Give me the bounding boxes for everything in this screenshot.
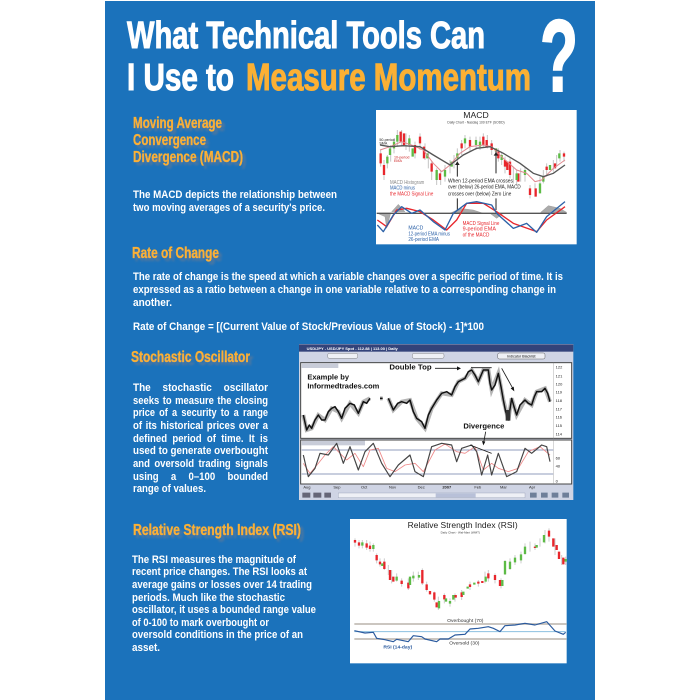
text: RSI description: oscillator, it uses a bounded range value xyxy=(132,604,316,616)
text: RSI description xyxy=(132,554,316,654)
chart: Stochastic Oscillator screenshot: Mar xyxy=(500,485,508,490)
text: Rate of Change description xyxy=(133,271,563,309)
chart: Stochastic Oscillator screenshot: 119 xyxy=(556,390,563,395)
chart: MACD: EMA xyxy=(394,159,402,163)
chart: Stochastic Oscillator screenshot: Nov xyxy=(389,485,396,490)
chart: Stochastic Oscillator screenshot: 121 xyxy=(556,373,563,378)
text: Stochastic description: price of a security to a range xyxy=(133,407,268,419)
heading: Rate of Change: Rate of Change xyxy=(132,245,219,262)
chart: Stochastic Oscillator screenshot: Indicator Blacklist xyxy=(507,354,536,358)
chart: RSI: RSI (14-day) xyxy=(383,645,412,651)
title: I Use to xyxy=(127,57,234,99)
text: MACD description xyxy=(133,189,337,214)
title xyxy=(127,15,531,99)
blue poster background xyxy=(105,1,595,700)
chart: Stochastic Oscillator screenshot: Oct xyxy=(361,485,368,490)
heading: RSI: Relative Strength Index (RSI) xyxy=(133,522,301,539)
chart: MACD: 12-period EMA minus xyxy=(408,231,450,237)
chart: Stochastic Oscillator screenshot xyxy=(299,344,573,500)
text: Rate of Change description: expressed as a ratio between a change in one variable relative to a corresponding change in xyxy=(133,284,556,296)
heading: Stochastic Oscillator: Stochastic Oscillator xyxy=(131,349,250,366)
text: Rate of Change description: The rate of change is the speed at which a variable changes over a specific period of time. It is xyxy=(133,271,563,283)
chart: Stochastic Oscillator screenshot: 40 xyxy=(556,463,561,468)
chart: Stochastic Oscillator screenshot: Apr xyxy=(529,485,536,490)
heading: MACD: Convergence xyxy=(133,132,206,149)
text: Stochastic description: seeks to measure the closing xyxy=(133,395,268,407)
chart: Stochastic Oscillator screenshot: 115 xyxy=(556,423,563,428)
chart: MACD: over (below) 26-period EMA, MACD xyxy=(448,185,521,191)
text: RSI description: recent price changes. The RSI looks at xyxy=(132,566,307,578)
chart: MACD: 9-period EMA xyxy=(463,227,496,233)
chart: MACD: Daily Chart - Nasdaq 100 ETF (SODD) xyxy=(447,121,505,125)
chart: MACD: 10-period xyxy=(394,155,409,159)
chart: RSI: Overbought (70) xyxy=(447,618,484,624)
title: What Technical Tools Can xyxy=(127,15,485,57)
chart: MACD: of the MACD xyxy=(463,233,489,239)
chart: RSI xyxy=(350,519,567,663)
chart: Stochastic Oscillator screenshot: 120 xyxy=(556,381,563,386)
chart: Stochastic Oscillator screenshot: USD/JPY - USD/JPY Spot - 112.88 | 113.00 | Daily xyxy=(307,346,399,351)
chart: MACD: crosses over (below) Zero Line xyxy=(448,191,511,197)
chart: Stochastic Oscillator screenshot: 122 xyxy=(556,365,563,370)
chart: Stochastic Oscillator screenshot: 0 xyxy=(556,479,559,484)
chart: RSI: Daily Chart - Wal-Mart (WMT) xyxy=(441,531,480,535)
text: RSI description: average gains or losses over 14 trading xyxy=(132,579,312,591)
chart: MACD xyxy=(376,110,577,244)
chart: RSI: Oversold (30) xyxy=(449,641,480,647)
chart: Stochastic Oscillator screenshot: 117 xyxy=(556,406,563,411)
chart: Stochastic Oscillator screenshot: 114 xyxy=(556,431,563,436)
chart: MACD: MACD Signal Line xyxy=(463,221,499,227)
chart: MACD: MACD Histogram xyxy=(390,180,425,186)
text: RSI description: asset. xyxy=(132,642,160,654)
text: Stochastic description: The stochastic oscillator xyxy=(133,382,269,394)
heading: MACD: Moving Average xyxy=(133,115,222,132)
text: Rate of Change formula: Rate of Change = [(Current Value of Stock/Previous Value of Stock) - 1]*100 xyxy=(133,321,484,333)
text: Stochastic description: range of values. xyxy=(133,483,206,495)
text: Rate of Change description: another. xyxy=(133,297,172,309)
chart: Stochastic Oscillator screenshot: Double Top xyxy=(389,362,432,371)
text: RSI description: periods. Much like the stochastic xyxy=(132,592,285,604)
text: MACD description: two moving averages of a security's price. xyxy=(133,202,325,214)
chart: RSI: Relative Strength Index (RSI) xyxy=(408,521,518,530)
chart: MACD: When 12-period EMA crosses xyxy=(448,178,513,184)
text: Stochastic description: and oversold trading signals xyxy=(133,458,268,470)
chart: MACD: MACD xyxy=(463,110,489,120)
chart: MACD: MACD minus xyxy=(390,185,415,191)
chart: Stochastic Oscillator screenshot: Informedtrades.com xyxy=(307,382,380,391)
text: Stochastic description: used to generate overbought xyxy=(133,445,268,457)
chart: MACD: 26-period EMA xyxy=(408,237,439,243)
chart: Stochastic Oscillator screenshot: 118 xyxy=(556,398,563,403)
heading: MACD: Divergence (MACD) xyxy=(133,149,243,166)
heading: MACD xyxy=(133,115,243,166)
chart: Stochastic Oscillator screenshot: Feb xyxy=(474,485,482,490)
text: RSI description: oversold conditions in the price of an xyxy=(132,629,303,641)
chart: Stochastic Oscillator screenshot: 60 xyxy=(556,455,561,460)
text: RSI description: The RSI measures the magnitude of xyxy=(132,554,296,566)
text: Stochastic description: of its historical prices over a xyxy=(133,420,269,432)
chart: Stochastic Oscillator screenshot: Dec xyxy=(418,485,425,490)
chart: MACD: SMA xyxy=(379,142,388,146)
icon: question mark: ? xyxy=(540,0,578,113)
chart: Stochastic Oscillator screenshot: Sep xyxy=(333,485,341,490)
chart: MACD: 50-period xyxy=(379,138,395,142)
text: RSI description: of 0-100 to mark overbought or xyxy=(132,617,270,629)
title: Measure Momentum xyxy=(246,57,531,99)
chart: Stochastic Oscillator screenshot: Divergence xyxy=(463,421,504,430)
text: Stochastic description: using a 0–100 bounded xyxy=(133,471,268,483)
text: MACD description: The MACD depicts the relationship between xyxy=(133,189,337,201)
chart: Stochastic Oscillator screenshot: 2007 xyxy=(442,485,452,490)
chart: MACD: the MACD Signal Line xyxy=(390,192,433,198)
chart: Stochastic Oscillator screenshot: Aug xyxy=(303,485,310,490)
text: Stochastic description xyxy=(133,382,269,495)
chart: Stochastic Oscillator screenshot: 116 xyxy=(556,415,563,420)
chart: MACD: MACD xyxy=(408,226,423,232)
text: Stochastic description: defined period of time. It is xyxy=(133,433,268,445)
chart: Stochastic Oscillator screenshot: Example by xyxy=(307,372,350,381)
